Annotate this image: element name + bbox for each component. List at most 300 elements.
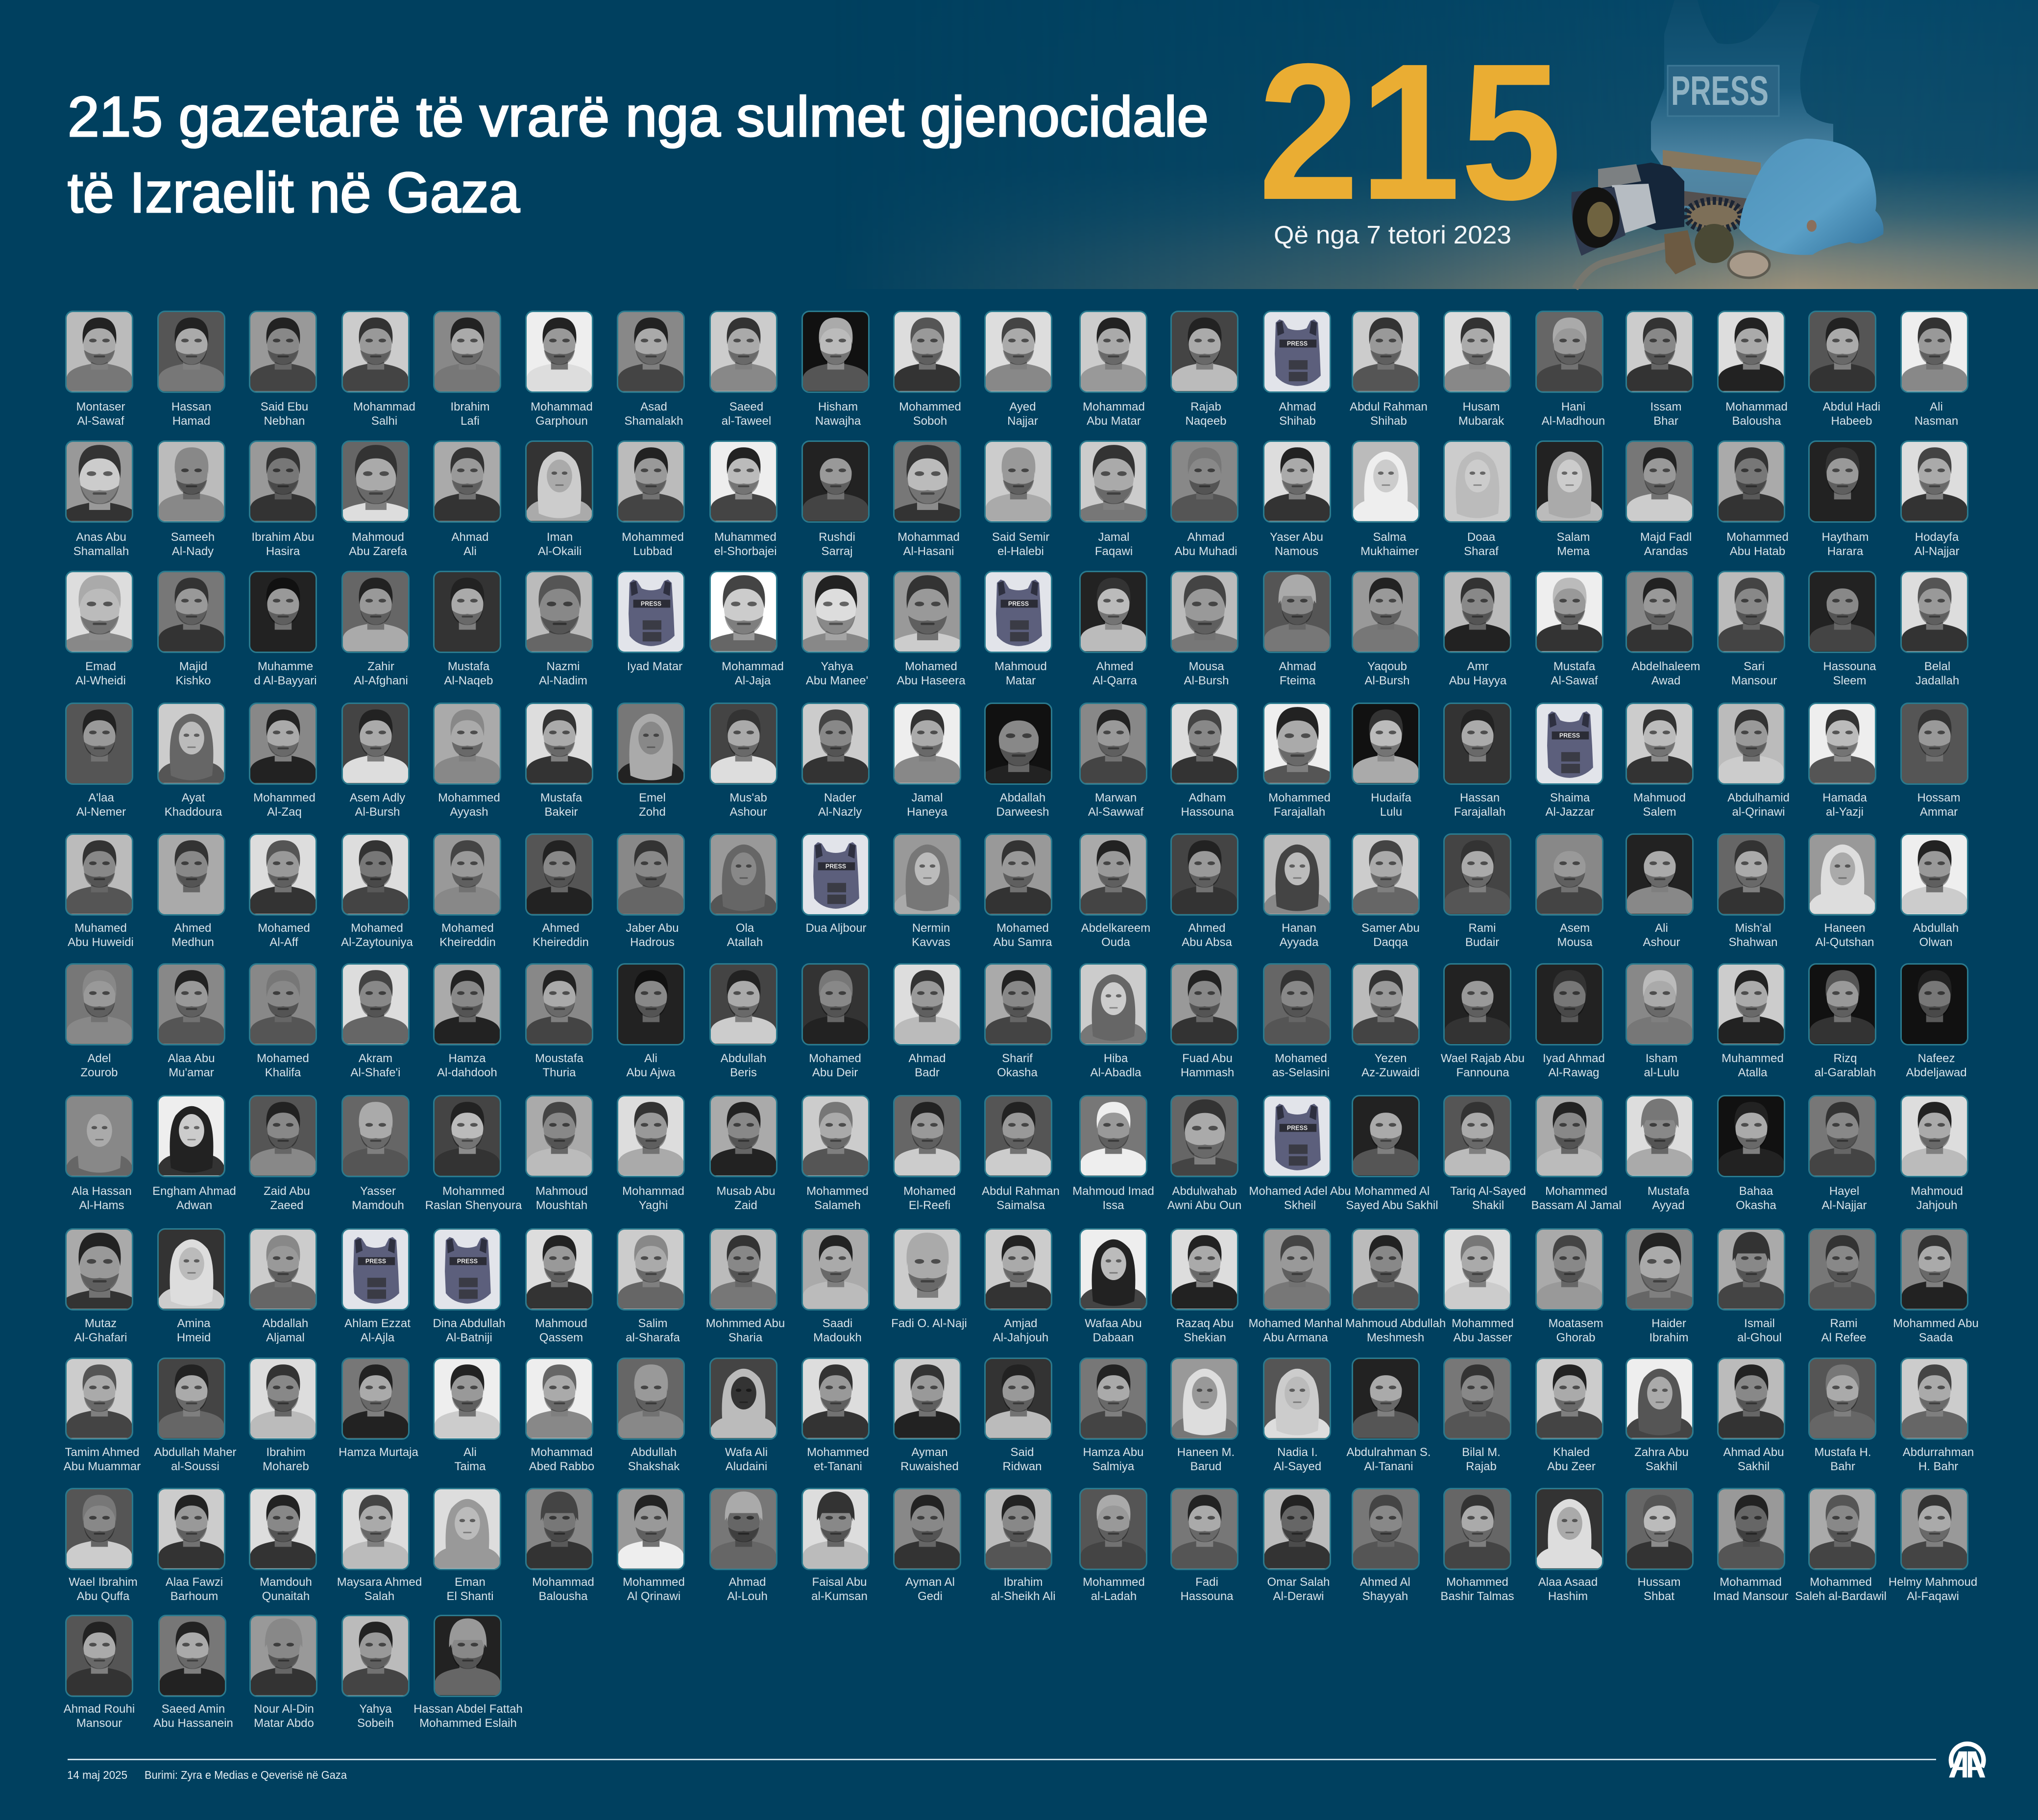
photo (65, 440, 133, 523)
card: Haneen Al-Qutshan (1808, 833, 1876, 946)
photo (65, 311, 133, 393)
photo (617, 1488, 685, 1570)
photo (157, 833, 225, 916)
name: Mamdouh (260, 1576, 312, 1588)
card: Asem Adly Al-Bursh (341, 703, 410, 815)
name: Mohammed (1545, 1185, 1607, 1197)
name: Jamal (1098, 530, 1130, 544)
name (111, 1575, 277, 1603)
name: Hodayfa (1915, 530, 1959, 544)
name: al-Sharafa (626, 1331, 680, 1344)
row 7 (0, 1095, 2038, 1217)
name: Shekian (1184, 1331, 1226, 1344)
name: Ibrahim (1003, 1576, 1043, 1588)
name (1394, 1575, 1561, 1603)
name: Mousa (1557, 936, 1593, 948)
photo (65, 1228, 133, 1310)
name (294, 791, 461, 819)
name (1854, 1184, 2020, 1212)
card: Eman El Shanti (433, 1488, 501, 1601)
name: Eman (455, 1576, 485, 1588)
name: Ismail (1744, 1317, 1775, 1330)
name: Barud (1190, 1460, 1222, 1473)
name: Mema (1557, 545, 1590, 558)
name: Husam (1462, 400, 1500, 413)
photo (984, 1228, 1052, 1310)
name: Emel (639, 791, 666, 804)
photo (1443, 311, 1511, 393)
name: Mubarak (1458, 414, 1504, 427)
name: Hadrous (630, 936, 675, 948)
photo (1808, 1488, 1876, 1570)
name: Hamada (1822, 791, 1867, 804)
card: Salma Mukhaimer (1352, 440, 1420, 553)
photo (1900, 1358, 1968, 1440)
card: Mohammed Abu Saada (1900, 1228, 1968, 1341)
name (298, 659, 464, 688)
name: Ammar (1920, 805, 1958, 818)
name: Abu Hatab (1730, 545, 1785, 558)
name (110, 921, 276, 949)
card: Mohammed al-Ladah (1079, 1488, 1147, 1601)
row 5 (0, 833, 2038, 956)
name (295, 530, 461, 558)
name: Doaa (1467, 530, 1495, 544)
name: Emad (85, 659, 116, 673)
name (1675, 791, 1842, 819)
name: Balousha (1732, 414, 1781, 427)
name (754, 1184, 921, 1212)
name: Shakil (1472, 1198, 1504, 1212)
name: Hassouna (1181, 805, 1234, 818)
name: Al-Bursh (1364, 674, 1410, 687)
name: Saeed (729, 400, 763, 413)
name (1124, 1051, 1290, 1080)
photo (1263, 833, 1331, 916)
card: Jamal Faqawi (1079, 440, 1147, 553)
card: Mustafa H. Bahr (1808, 1358, 1876, 1470)
card: Samer Abu Daqqa (1352, 833, 1420, 946)
card: Mohammed Lubbad (617, 440, 685, 553)
name: Abdallah (1000, 791, 1045, 804)
card: Bilal M. Rajab (1443, 1358, 1511, 1470)
name: Mohammed (623, 1576, 685, 1588)
photo (1170, 440, 1238, 523)
name: Okasha (997, 1066, 1038, 1079)
photo (1808, 571, 1876, 653)
name: Okasha (1736, 1198, 1776, 1212)
name: Sari (1744, 659, 1765, 673)
name: Bashir Talmas (1440, 1589, 1514, 1603)
photo (1352, 440, 1420, 523)
card: Hayel Al-Najjar (1808, 1095, 1876, 1208)
name: Adwan (176, 1198, 212, 1212)
card: Saeed Amin Abu Hassanein (158, 1615, 226, 1727)
name (660, 1051, 827, 1080)
name (112, 1445, 278, 1474)
photo (341, 1095, 410, 1177)
name (1307, 1051, 1474, 1080)
photo (893, 311, 961, 393)
photo (1900, 571, 1968, 653)
photo (1263, 703, 1331, 785)
photo (1717, 703, 1785, 785)
name (385, 659, 552, 688)
name (1853, 1316, 2019, 1344)
card: Mohammed Saleh al-Bardawil (1808, 1488, 1876, 1601)
photo (984, 1095, 1052, 1177)
name: Rami (1830, 1317, 1858, 1330)
name (934, 1051, 1100, 1080)
card: Mohammed Farajallah (1263, 703, 1331, 815)
name (1854, 659, 2020, 688)
photo (249, 703, 317, 785)
photo (1535, 833, 1603, 916)
name (570, 1184, 737, 1212)
name (1218, 1051, 1384, 1080)
name: Mohamed Manhal (1248, 1317, 1343, 1330)
photo (157, 703, 225, 785)
name (1578, 921, 1745, 949)
name: Mohammed (807, 1445, 869, 1459)
name: as-Selasini (1272, 1066, 1330, 1079)
name (1123, 400, 1289, 428)
name: Farajallah (1274, 805, 1325, 818)
name: Bahr (1830, 1460, 1855, 1473)
name (387, 400, 554, 428)
name: Yahya (821, 659, 853, 673)
name: Zahra Abu (1634, 1445, 1689, 1459)
card: Muhammed el-Shorbajei (709, 440, 777, 553)
card: Ibrahim Abu Hasira (249, 440, 317, 553)
name: Medhun (171, 936, 214, 948)
name (16, 1051, 182, 1080)
card: Mohammed Bashir Talmas (1443, 1488, 1511, 1601)
name: Sharaf (1464, 545, 1499, 558)
photo (1626, 703, 1694, 785)
name: Al-Nazly (818, 805, 862, 818)
name: Saadi (823, 1317, 852, 1330)
name (1216, 921, 1383, 949)
name: Abdulwahab (1172, 1185, 1237, 1197)
name: Awni Abu Oun (1167, 1198, 1241, 1212)
name (663, 400, 830, 428)
name (1312, 1316, 1479, 1344)
name: Mamdouh (352, 1198, 404, 1212)
name (1305, 1445, 1472, 1474)
name: Ahmed Al (1360, 1576, 1410, 1588)
name (1123, 659, 1289, 688)
card: Anas Abu Shamallah (65, 440, 133, 553)
photo (157, 1488, 225, 1570)
name (1758, 1575, 1924, 1603)
name: Al-Madhoun (1542, 414, 1605, 427)
card: Muhammed Atalla (1717, 963, 1785, 1076)
name (1668, 1575, 1834, 1603)
card: Abdullah Shakshak (617, 1358, 685, 1470)
card: Bahaa Okasha (1717, 1095, 1785, 1208)
card: Mohamed El-Reefi (893, 1095, 961, 1208)
name: Ahmad (908, 1051, 946, 1065)
name (387, 530, 554, 558)
photo (1443, 963, 1511, 1045)
name: et-Tanani (814, 1460, 862, 1473)
name: Mohamed (905, 659, 957, 673)
card: Salam Mema (1535, 440, 1603, 553)
photo (433, 440, 501, 523)
name: Mohammed (442, 1185, 505, 1197)
name: Abed Rabbo (529, 1460, 594, 1473)
card: Ali Abu Ajwa (617, 963, 685, 1076)
name: Rajab (1466, 1460, 1497, 1473)
name: Hossam (1917, 791, 1961, 804)
name: Abdul Rahman (982, 1185, 1060, 1197)
name (1305, 400, 1472, 428)
name: Badr (915, 1066, 940, 1079)
name: Kishko (175, 674, 211, 687)
name (665, 791, 832, 819)
photo (341, 571, 410, 653)
name: Maysara Ahmed (337, 1576, 422, 1588)
card: Ibrahim Mohareb (249, 1358, 317, 1470)
card: Rizq al-Garablah (1808, 963, 1876, 1076)
photo (157, 311, 225, 393)
name: Ashour (1643, 936, 1680, 948)
name: Taima (454, 1460, 486, 1473)
name (1492, 1316, 1659, 1344)
photo (65, 703, 133, 785)
name: Kheireddin (439, 936, 496, 948)
name (1399, 1051, 1566, 1080)
name (1031, 1575, 1197, 1603)
name (661, 921, 828, 949)
name: Mohammed (1726, 530, 1789, 544)
name: Mohammed (1810, 1576, 1872, 1588)
photo (1263, 1358, 1331, 1440)
name (19, 1445, 185, 1474)
name: Alaa Asaad (1538, 1576, 1598, 1588)
name (1676, 1316, 1843, 1344)
name: Al-Nady (172, 545, 214, 558)
name: Mahmoud (535, 1185, 588, 1197)
name: Ayat (182, 791, 205, 804)
name (1399, 1316, 1566, 1344)
card: Husam Mubarak (1443, 311, 1511, 423)
name: Bhar (1653, 414, 1678, 427)
name (669, 659, 836, 688)
name (18, 791, 184, 819)
name (387, 1445, 554, 1474)
name: Abdullah (721, 1051, 766, 1065)
card: Mohammad Al-Jaja (709, 571, 777, 683)
name: Abu Matar (1087, 414, 1141, 427)
photo (1626, 311, 1694, 393)
name: Ahmed (174, 921, 212, 935)
card: Mohammed Ayyash (433, 703, 501, 815)
name: Mohamed (996, 921, 1049, 935)
name (1761, 1184, 1927, 1212)
photo (1535, 440, 1603, 523)
subtitle date: Që nga 7 tetori 2023 (1274, 221, 1511, 249)
photo (1263, 311, 1331, 393)
card: Amjad Al-Jahjouh (984, 1228, 1052, 1341)
name: Kheireddin (533, 936, 589, 948)
name: Ahmed (1096, 659, 1134, 673)
name: Al-Okaili (538, 545, 582, 558)
name: Nafeez (1917, 1051, 1955, 1065)
card: Isham al-Lulu (1626, 963, 1694, 1076)
name: Al-Faqawi (1907, 1589, 1959, 1603)
name: Nawajha (815, 414, 861, 427)
photo (984, 963, 1052, 1045)
name: Mahmoud Imad (1072, 1185, 1154, 1197)
name: Shakshak (628, 1460, 679, 1473)
photo (1352, 1488, 1420, 1570)
name (1582, 659, 1749, 688)
big number 215: 215 (1258, 24, 1562, 241)
name (1213, 530, 1380, 558)
card: Faisal Abu al-Kumsan (801, 1488, 870, 1601)
name (1033, 1051, 1199, 1080)
name (1674, 530, 1841, 558)
card: Mahmoud Abu Zarefa (341, 440, 410, 553)
name (1767, 659, 1933, 688)
photo (1443, 1228, 1511, 1310)
photo (617, 833, 685, 916)
name: Lulu (1380, 805, 1402, 818)
card: Haider Ibrahim (1626, 1228, 1694, 1341)
photo (1900, 440, 1968, 523)
name: Ahmed (542, 921, 580, 935)
name: Fadi (1195, 1576, 1218, 1588)
photo (1443, 1095, 1511, 1177)
name: Abdul Hadi (1823, 400, 1880, 413)
photo (341, 1358, 410, 1440)
card: Majid Kishko (157, 571, 225, 683)
card: Zahir Al-Afghani (341, 571, 410, 683)
name (385, 1702, 552, 1730)
name: Hanan (1282, 921, 1316, 935)
card: Emel Zohd (617, 703, 685, 815)
name (201, 791, 367, 819)
name: Ghorab (1556, 1331, 1596, 1344)
name: Madoukh (813, 1331, 862, 1344)
name (296, 1575, 462, 1603)
name: Mahmoud Abdullah (1345, 1317, 1446, 1330)
photo (1535, 1488, 1603, 1570)
name (1398, 1445, 1565, 1474)
name (1484, 1575, 1651, 1603)
card: Mohamed Khalifa (249, 963, 317, 1076)
name: Hisham (818, 400, 858, 413)
name: Yaghi (639, 1198, 668, 1212)
photo (801, 1228, 870, 1310)
photo (433, 1358, 501, 1440)
name: Yaser Abu (1270, 530, 1323, 544)
name (1217, 1184, 1383, 1212)
name: Namous (1275, 545, 1318, 558)
name: Raslan Shenyoura (425, 1198, 522, 1212)
photo (249, 1358, 317, 1440)
name (202, 659, 368, 688)
name: Mustafa (540, 791, 582, 804)
card: Mahmoud Abdullah Meshmesh (1352, 1228, 1420, 1341)
name: Ala Hassan (72, 1185, 132, 1197)
photo (984, 703, 1052, 785)
photo (617, 1228, 685, 1310)
card: Mohamed Abu Deir (801, 963, 870, 1076)
card: Alaa Abu Mu'amar (157, 963, 225, 1076)
photo (157, 1095, 225, 1177)
photo (1626, 1488, 1694, 1570)
name (1582, 400, 1749, 428)
card: Yaqoub Al-Bursh (1352, 571, 1420, 683)
card: Wafa Ali Aludaini (709, 1358, 777, 1470)
card: Nazmi Al-Nadim (525, 571, 593, 683)
photo (709, 571, 777, 653)
name: Salim (638, 1317, 667, 1330)
row 1 (65, 311, 1968, 427)
name (200, 530, 366, 558)
photo (709, 1488, 777, 1570)
photo (893, 833, 961, 916)
name (1490, 400, 1657, 428)
name: Nader (824, 791, 856, 804)
card: Mohammed Abu Hatab (1717, 440, 1785, 553)
name: Al-Hasani (903, 545, 954, 558)
name: Engham Ahmad (152, 1185, 236, 1197)
name: al-Soussi (171, 1460, 219, 1473)
name (938, 530, 1104, 558)
name (754, 1316, 921, 1344)
photo (893, 440, 961, 523)
name: Salam (1556, 530, 1590, 544)
photo (341, 963, 410, 1045)
name (1769, 400, 1935, 428)
name: Ayyash (450, 805, 488, 818)
photo (65, 1615, 133, 1697)
name (1490, 530, 1657, 558)
card: Hamza Murtaja (341, 1358, 410, 1470)
card: Ahmad Al-Louh (709, 1488, 777, 1601)
name: Al-Nemer (76, 805, 126, 818)
photo (1352, 1095, 1420, 1177)
name: Al-Sawaf (77, 414, 124, 427)
name: Wafaa Abu (1085, 1317, 1142, 1330)
name: Amjad (1004, 1317, 1038, 1330)
name (1123, 530, 1289, 558)
name: Al-Jahjouh (993, 1331, 1048, 1344)
name: Dina Abdullah (433, 1317, 506, 1330)
name: Mansour (1731, 674, 1777, 687)
photo (1170, 1358, 1238, 1440)
name: Khaddoura (165, 805, 222, 818)
name (939, 1445, 1105, 1474)
name: Sakhil (1738, 1460, 1770, 1473)
photo (65, 1358, 133, 1440)
photo (984, 440, 1052, 523)
name: Abu Hayya (1449, 674, 1506, 687)
name: Moustafa (535, 1051, 583, 1065)
name: Hassouna (1180, 1589, 1234, 1603)
card: Ayman Ruwaished (893, 1358, 961, 1470)
name: Mohammad (1083, 400, 1145, 413)
photo (1626, 833, 1694, 916)
photo (1808, 311, 1876, 393)
card: Ahmad Rouhi Mansour (65, 1615, 133, 1727)
name (480, 659, 647, 688)
photo (1263, 440, 1331, 523)
